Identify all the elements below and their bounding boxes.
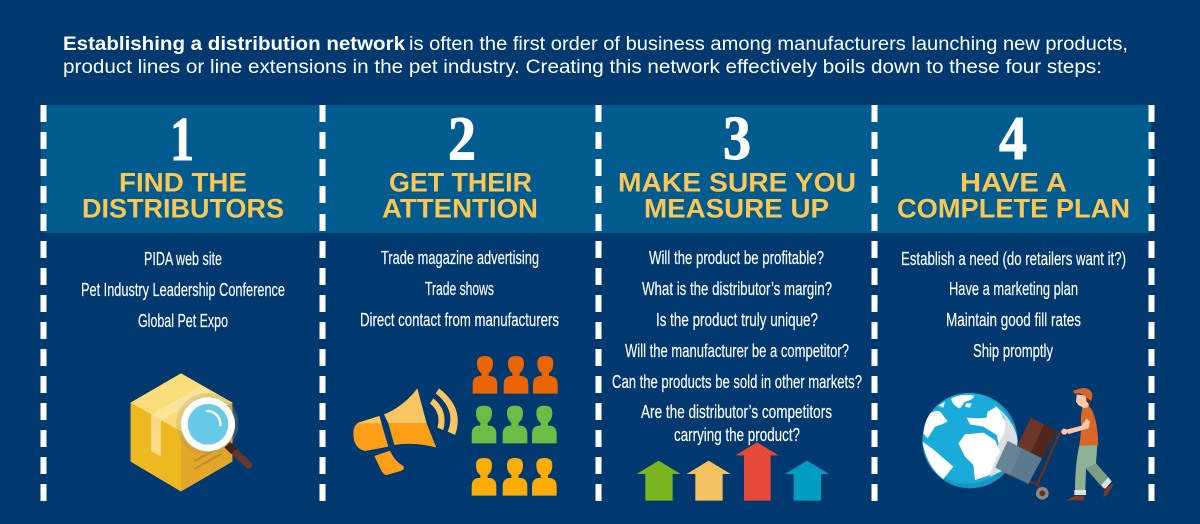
header band bbox=[41, 105, 1151, 233]
list: step 1 bbox=[81, 249, 285, 331]
icon: globe, hand truck and delivery man bbox=[922, 388, 1114, 500]
list: step 3: carrying the product? bbox=[674, 425, 800, 445]
list: step 1: Pet Industry Leadership Conference bbox=[81, 280, 285, 300]
number 1: 1 bbox=[170, 106, 194, 174]
list: step 4: Maintain good fill rates bbox=[946, 310, 1081, 330]
list: step 3: Will the manufacturer be a competitor? bbox=[625, 341, 849, 361]
list: step 3: Can the products be sold in other markets? bbox=[612, 372, 862, 392]
intro text: Establishing a distribution network bbox=[63, 34, 405, 55]
heading: have a complete plan bbox=[897, 168, 1130, 224]
list: step 3 bbox=[612, 248, 862, 445]
list: step 3: Are the distributor’s competitors bbox=[641, 402, 832, 422]
list: step 3: Will the product be profitable? bbox=[649, 248, 824, 268]
heading: get their attention: ATTENTION bbox=[382, 194, 538, 224]
heading: get their attention: GET THEIR bbox=[389, 168, 532, 198]
intro text bbox=[63, 34, 1128, 78]
list: step 1: PIDA web site bbox=[144, 249, 222, 269]
number 2: 2 bbox=[448, 106, 476, 174]
icon: audience groups bbox=[472, 356, 558, 496]
intro text: product lines or line extensions in the pet industry. Creating this network effectively boils down to these four steps: bbox=[63, 57, 1102, 78]
panel: step 3 bbox=[612, 105, 862, 501]
intro text: is often the first order of business among manufacturers launching new products, bbox=[409, 34, 1128, 55]
heading: find the distributors: DISTRIBUTORS bbox=[82, 194, 284, 224]
heading: find the distributors bbox=[82, 168, 284, 224]
icon: growth arrows bbox=[637, 442, 829, 501]
panel: step 2 bbox=[353, 106, 559, 496]
heading: get their attention bbox=[382, 168, 538, 224]
globe bbox=[922, 393, 1018, 488]
list: step 3: Is the product truly unique? bbox=[656, 310, 818, 330]
heading: have a complete plan: COMPLETE PLAN bbox=[897, 194, 1130, 224]
heading: have a complete plan: HAVE A bbox=[960, 168, 1067, 198]
list: step 4: Ship promptly bbox=[973, 341, 1053, 361]
list: step 2: Trade magazine advertising bbox=[381, 248, 539, 268]
number 3: 3 bbox=[723, 105, 751, 173]
icon: box with magnifying glass bbox=[131, 373, 249, 491]
heading: make sure you measure up: MAKE SURE YOU bbox=[618, 168, 856, 198]
list: step 4: Establish a need (do retailers want it?) bbox=[901, 249, 1126, 269]
hand truck and parcels bbox=[995, 418, 1068, 500]
delivery man bbox=[1061, 388, 1114, 500]
list: step 3: What is the distributor’s margin? bbox=[642, 279, 832, 299]
list: step 1: Global Pet Expo bbox=[138, 311, 228, 331]
panel: step 4 bbox=[897, 105, 1130, 500]
panel: step 1 bbox=[81, 106, 285, 491]
list: step 2: Trade shows bbox=[425, 279, 494, 299]
list: step 2: Direct contact from manufacturers bbox=[360, 310, 559, 330]
list: step 4: Have a marketing plan bbox=[949, 279, 1078, 299]
number 4: 4 bbox=[999, 105, 1027, 173]
list: step 2 bbox=[360, 248, 559, 330]
heading: make sure you measure up: MEASURE UP bbox=[644, 194, 829, 224]
list: step 4 bbox=[901, 249, 1126, 361]
heading: find the distributors: FIND THE bbox=[119, 168, 247, 198]
icon: megaphone bbox=[353, 388, 458, 475]
heading: make sure you measure up bbox=[618, 168, 856, 224]
